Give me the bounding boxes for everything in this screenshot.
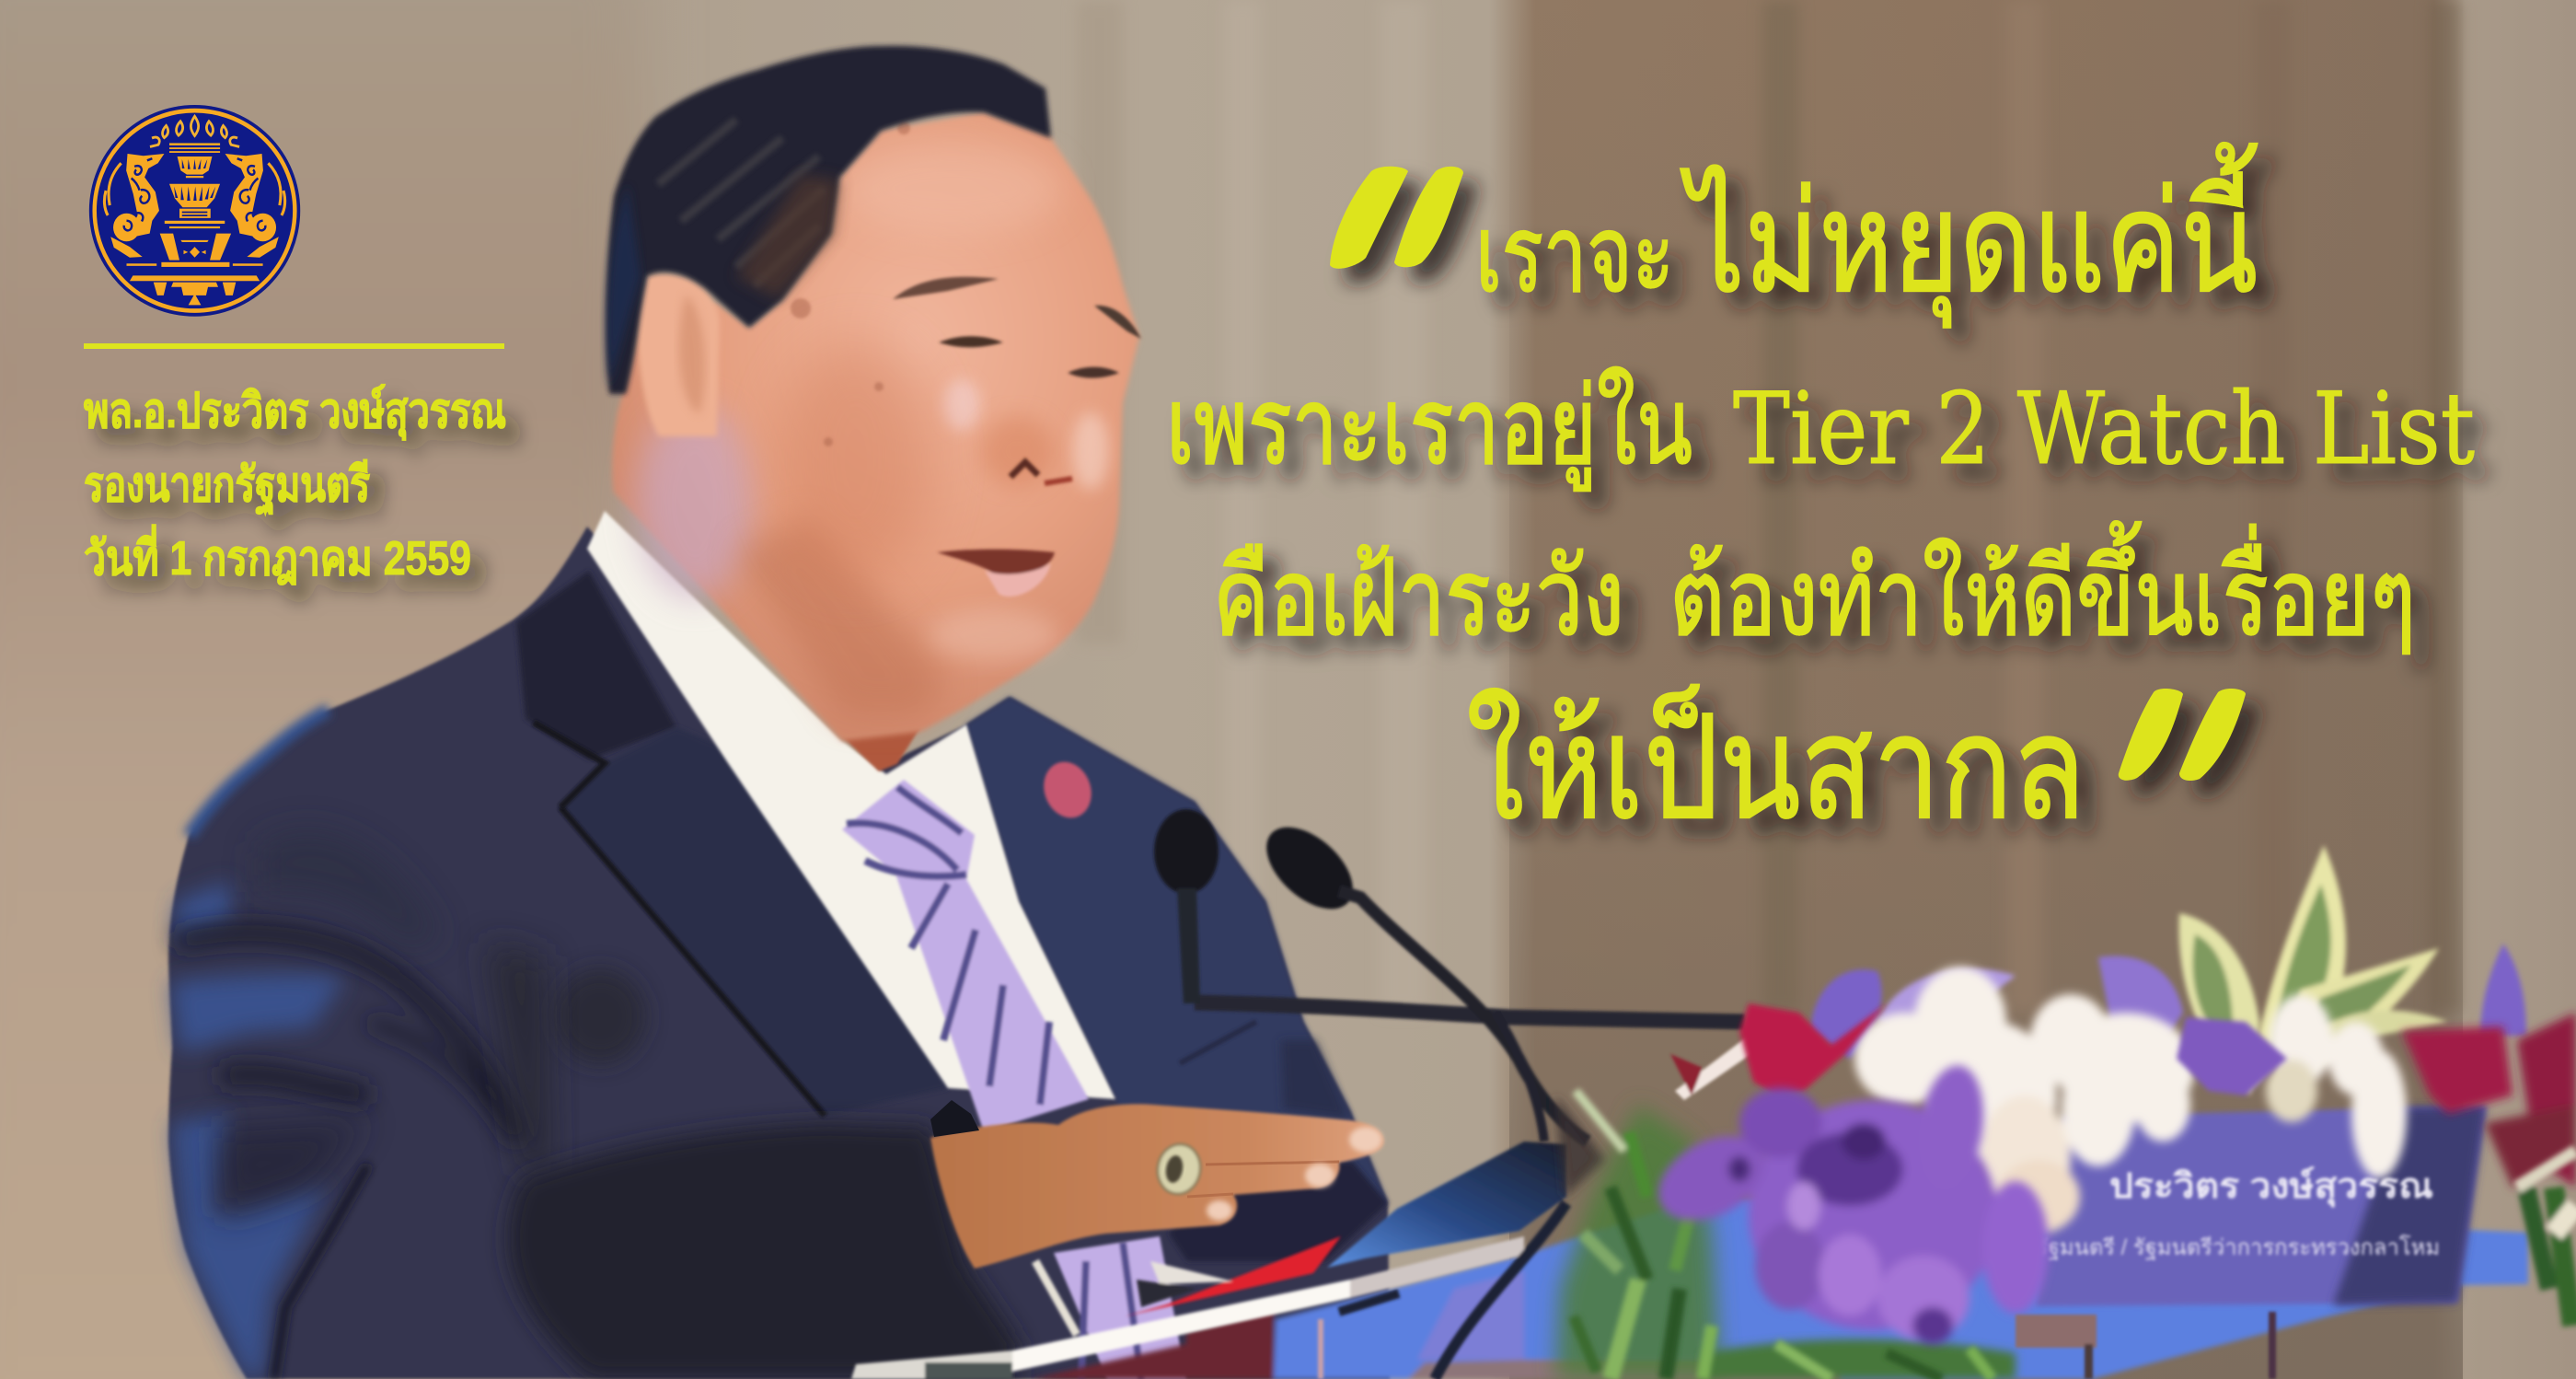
- photo: speaker: [168, 46, 1390, 1379]
- jacket: folds: [177, 933, 520, 1141]
- hand and ring: [930, 1104, 1388, 1269]
- large purple orchid: [1644, 1061, 2049, 1344]
- lapel pin: [1036, 755, 1099, 825]
- seal: table and base: [126, 221, 263, 305]
- white orchids: [1854, 967, 2407, 1234]
- quote line 2: เพราะเราอยู่ใน: [1166, 367, 1692, 491]
- facial features: [893, 277, 1141, 597]
- quote line 3: คือเฝ้าระวัง: [1213, 540, 1624, 658]
- nameplate: รัฐมนตรี / รัฐมนตรีว่าการกระทรวงกลาโหม: [2036, 1234, 2440, 1260]
- microphone right: [1252, 812, 1606, 1197]
- seal: urn: [169, 143, 220, 218]
- lectern: glass post: [1318, 1319, 1323, 1379]
- jacket: [168, 527, 1390, 1379]
- lectern: white edge: [1012, 1280, 1350, 1372]
- lectern: [851, 1141, 1566, 1379]
- lilac top petals: [1810, 944, 2526, 1059]
- ring: [1154, 1141, 1204, 1198]
- hair: [606, 46, 1051, 394]
- crimson orchid: [1739, 1003, 1887, 1095]
- sleeve: [507, 1123, 1019, 1379]
- nose: [1011, 462, 1038, 477]
- table legs: [2016, 1312, 2276, 1379]
- quote line 2: Tier 2 Watch List: [1733, 372, 2475, 487]
- opening quote mark: [1330, 167, 1463, 269]
- closing quote mark: [2119, 689, 2246, 781]
- jacket: blue sheen: [170, 881, 345, 1379]
- table decor: blue cloth band: [1031, 1197, 2528, 1379]
- green ferns: [1555, 1091, 2016, 1379]
- eyes: [939, 336, 1003, 347]
- nameplate: [2036, 1106, 2486, 1306]
- caption: date: วันที่ 1 กรกฎาคม 2559: [84, 525, 471, 585]
- purple orchid right: [2177, 1017, 2287, 1095]
- face: spots: [791, 122, 910, 446]
- eyebrows: [893, 277, 999, 299]
- seal: right lion: [225, 154, 285, 258]
- mouth: [937, 550, 1055, 576]
- tie: [842, 780, 1186, 1379]
- flowers and nameplate: [1555, 845, 2576, 1379]
- shirt: [587, 511, 1115, 1099]
- quote line 1: [1475, 142, 2258, 328]
- quote line 2: [1166, 367, 2475, 491]
- microphone arm: [1195, 1002, 1745, 1022]
- icon: government seal: [89, 105, 300, 317]
- lectern: cable: [1435, 1203, 1566, 1379]
- lectern: red strip: [1125, 1236, 1341, 1316]
- variegated leaves: [2178, 845, 2448, 1095]
- shadow under fingers: [1169, 1162, 1388, 1261]
- quote line 1: เราจะ: [1475, 197, 1674, 315]
- microphones: [1154, 809, 1745, 1197]
- quote line 1: ไม่หยุดแค่นี้: [1680, 142, 2258, 328]
- divider rule: [84, 343, 504, 349]
- neck and face: [612, 112, 1139, 741]
- speaker caption: [84, 384, 506, 585]
- jacket: upper collar and lapel: [516, 571, 676, 759]
- crimson orchids right: [2402, 1013, 2576, 1188]
- quote text: [1166, 142, 2475, 849]
- small red and white accents: [1670, 1036, 1758, 1100]
- jacket: right panel: [966, 697, 1388, 1234]
- microphone left: [1154, 809, 1219, 1003]
- shirt collar throat: [842, 727, 920, 771]
- greenery right: [2517, 1151, 2576, 1326]
- caption: name: พล.อ.ประวิตร วงษ์สุวรรณ: [84, 384, 506, 441]
- ear: [638, 273, 720, 436]
- seal: flames: [150, 116, 239, 146]
- quote line 3: ต้องทำให้ดีขึ้นเรื่อยๆ: [1669, 521, 2416, 658]
- shirt cuff: [930, 1100, 979, 1137]
- nameplate: ประวิตร วงษ์สุวรรณ: [2109, 1166, 2433, 1208]
- lectern: tablet: [1327, 1141, 1566, 1268]
- quote line 3: [1213, 521, 2416, 658]
- seal: left lion: [104, 154, 164, 258]
- caption: position: รองนายกรัฐมนตรี: [84, 458, 370, 516]
- quote line 4: ให้เป็นสากล: [1466, 685, 2085, 849]
